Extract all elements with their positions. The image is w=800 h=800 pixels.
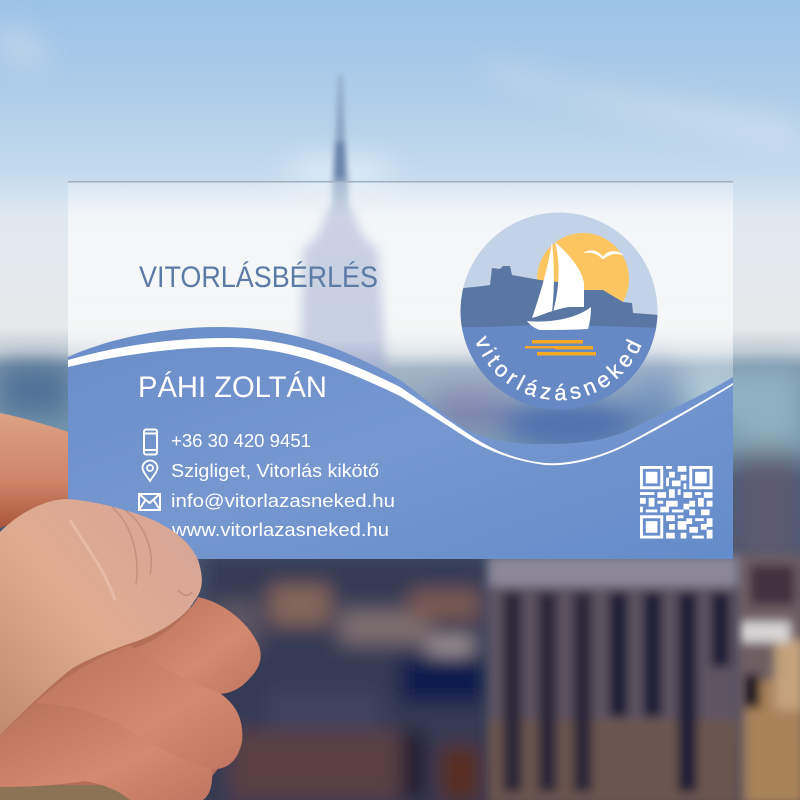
contact: phone: +36 30 420 9451 — [171, 431, 311, 451]
icon: envelope — [139, 494, 160, 510]
skyscraper spire — [331, 75, 349, 215]
logo sun — [537, 233, 629, 302]
transparent business card — [68, 181, 733, 559]
icon: phone — [144, 430, 157, 454]
logo castle hill — [455, 266, 660, 332]
ring finger — [35, 645, 242, 769]
logo sailboat — [527, 242, 591, 330]
thumb — [0, 499, 202, 735]
contact: website: www.vitorlazasneked.hu — [171, 520, 389, 540]
lower city blocks — [205, 555, 490, 800]
blue wave band — [68, 327, 733, 559]
hand base under fingers — [0, 605, 225, 785]
middle finger — [130, 597, 261, 694]
logo curved name: vitorlázásneked — [476, 335, 642, 400]
contact: phone — [144, 430, 311, 454]
logo sun reflection — [525, 340, 596, 356]
logo sky — [460, 212, 658, 328]
QR code — [640, 466, 712, 538]
index finger behind card — [0, 413, 75, 528]
icon: map pin — [142, 460, 158, 481]
logo water — [462, 325, 656, 410]
logo badge — [460, 212, 658, 410]
frosted card surface — [68, 182, 733, 444]
contact: email: info@vitorlazasneked.hu — [171, 491, 395, 511]
name: PÁHI ZOLTÁN — [138, 371, 327, 404]
white wave stripe — [68, 338, 733, 465]
little finger — [0, 703, 212, 800]
contact: address: Szigliget, Vitorlás kikötő — [171, 461, 379, 481]
blurred office building — [488, 556, 738, 800]
logo gull — [584, 251, 623, 259]
heading: vitorlásbérlés: VITORLÁSBÉRLÉS — [139, 261, 378, 294]
